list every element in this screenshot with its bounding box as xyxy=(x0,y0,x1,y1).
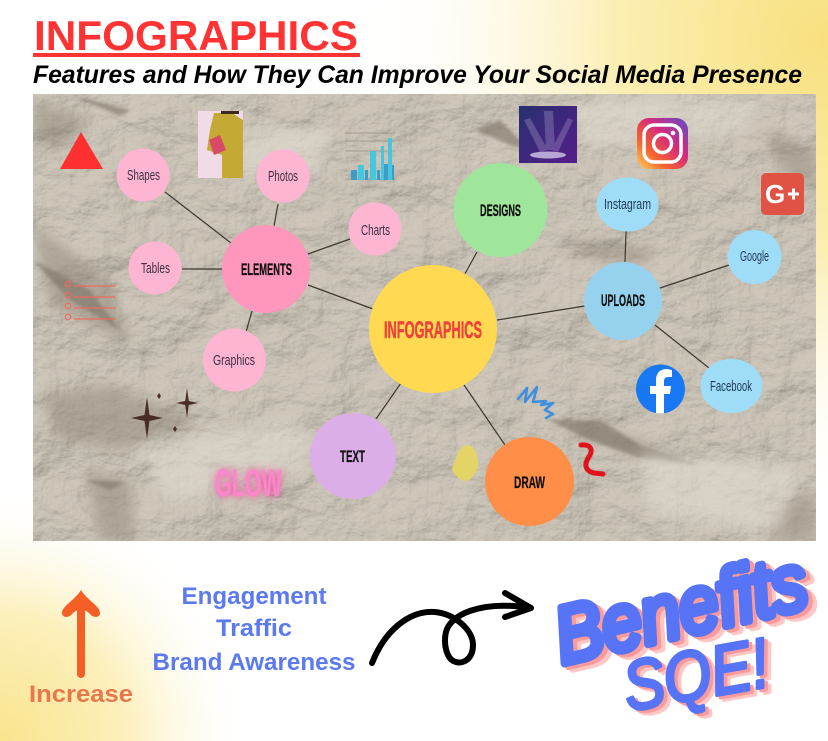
node: uploads xyxy=(584,262,662,340)
benefits list xyxy=(152,583,356,676)
node: text: TEXT xyxy=(340,447,365,466)
connector lines xyxy=(165,192,729,445)
icon: red squiggle xyxy=(581,445,603,474)
text: glow: GLOW xyxy=(215,463,282,505)
icon: list lines xyxy=(65,281,116,320)
benefits list: Brand Awareness xyxy=(152,649,356,676)
text: benefits SQE: SQE! xyxy=(617,624,774,726)
node: tables: Tables xyxy=(141,260,170,277)
panel: crumpled paper mind map xyxy=(33,94,816,541)
node: elements xyxy=(222,225,310,313)
node: facebook xyxy=(700,359,762,413)
icon: bar chart xyxy=(345,133,395,180)
icon: yellow blob xyxy=(452,445,478,481)
subtitle: Features and How They Can Improve Your Social Media Presence xyxy=(33,61,802,89)
text: glow xyxy=(215,463,282,505)
node: graphics xyxy=(203,328,266,392)
icon: google plus xyxy=(761,173,804,215)
benefits list: Traffic xyxy=(216,615,292,642)
icon: up arrow xyxy=(62,590,100,674)
node: designs xyxy=(454,163,548,257)
icon: red triangle xyxy=(60,132,103,169)
node: text xyxy=(310,413,396,499)
node: graphics: Graphics xyxy=(213,352,255,369)
icon: photo of person in yellow xyxy=(198,111,243,178)
node: shapes: Shapes xyxy=(127,167,160,184)
icon: facebook logo xyxy=(636,364,685,414)
node: photos xyxy=(256,150,310,202)
node: elements: ELEMENTS xyxy=(241,260,292,279)
icon: spotlight image xyxy=(519,106,577,163)
node: draw: DRAW xyxy=(514,473,546,492)
node: infographics xyxy=(369,265,497,393)
text: glow: GLOW xyxy=(215,463,282,505)
node: draw xyxy=(485,437,574,526)
benefits list: Engagement xyxy=(182,583,326,610)
node: facebook: Facebook xyxy=(710,378,752,395)
label: increase: Increase xyxy=(29,681,133,708)
title: INFOGRAPHICS xyxy=(34,12,358,59)
node: uploads: UPLOADS xyxy=(601,291,645,310)
icon: curly arrow xyxy=(372,593,531,663)
node: instagram xyxy=(596,178,658,232)
icon: blue scribble xyxy=(518,387,553,418)
icon: instagram logo xyxy=(637,118,688,169)
node: charts: Charts xyxy=(361,222,390,239)
text: benefits SQE: SQE! xyxy=(624,628,781,731)
node: photos: Photos xyxy=(268,168,298,185)
text: benefits SQE: SQE! xyxy=(621,626,778,728)
node: instagram: Instagram xyxy=(604,196,651,213)
node: google xyxy=(728,230,782,284)
icon: google plus: G xyxy=(765,179,785,209)
node: charts xyxy=(348,202,402,256)
node: designs: DESIGNS xyxy=(480,201,521,220)
icon: sparkles xyxy=(131,388,198,439)
node: google: Google xyxy=(740,248,769,265)
node: infographics: INFOGRAPHICS xyxy=(384,317,482,344)
node: tables xyxy=(128,242,182,294)
node: shapes xyxy=(116,148,170,202)
